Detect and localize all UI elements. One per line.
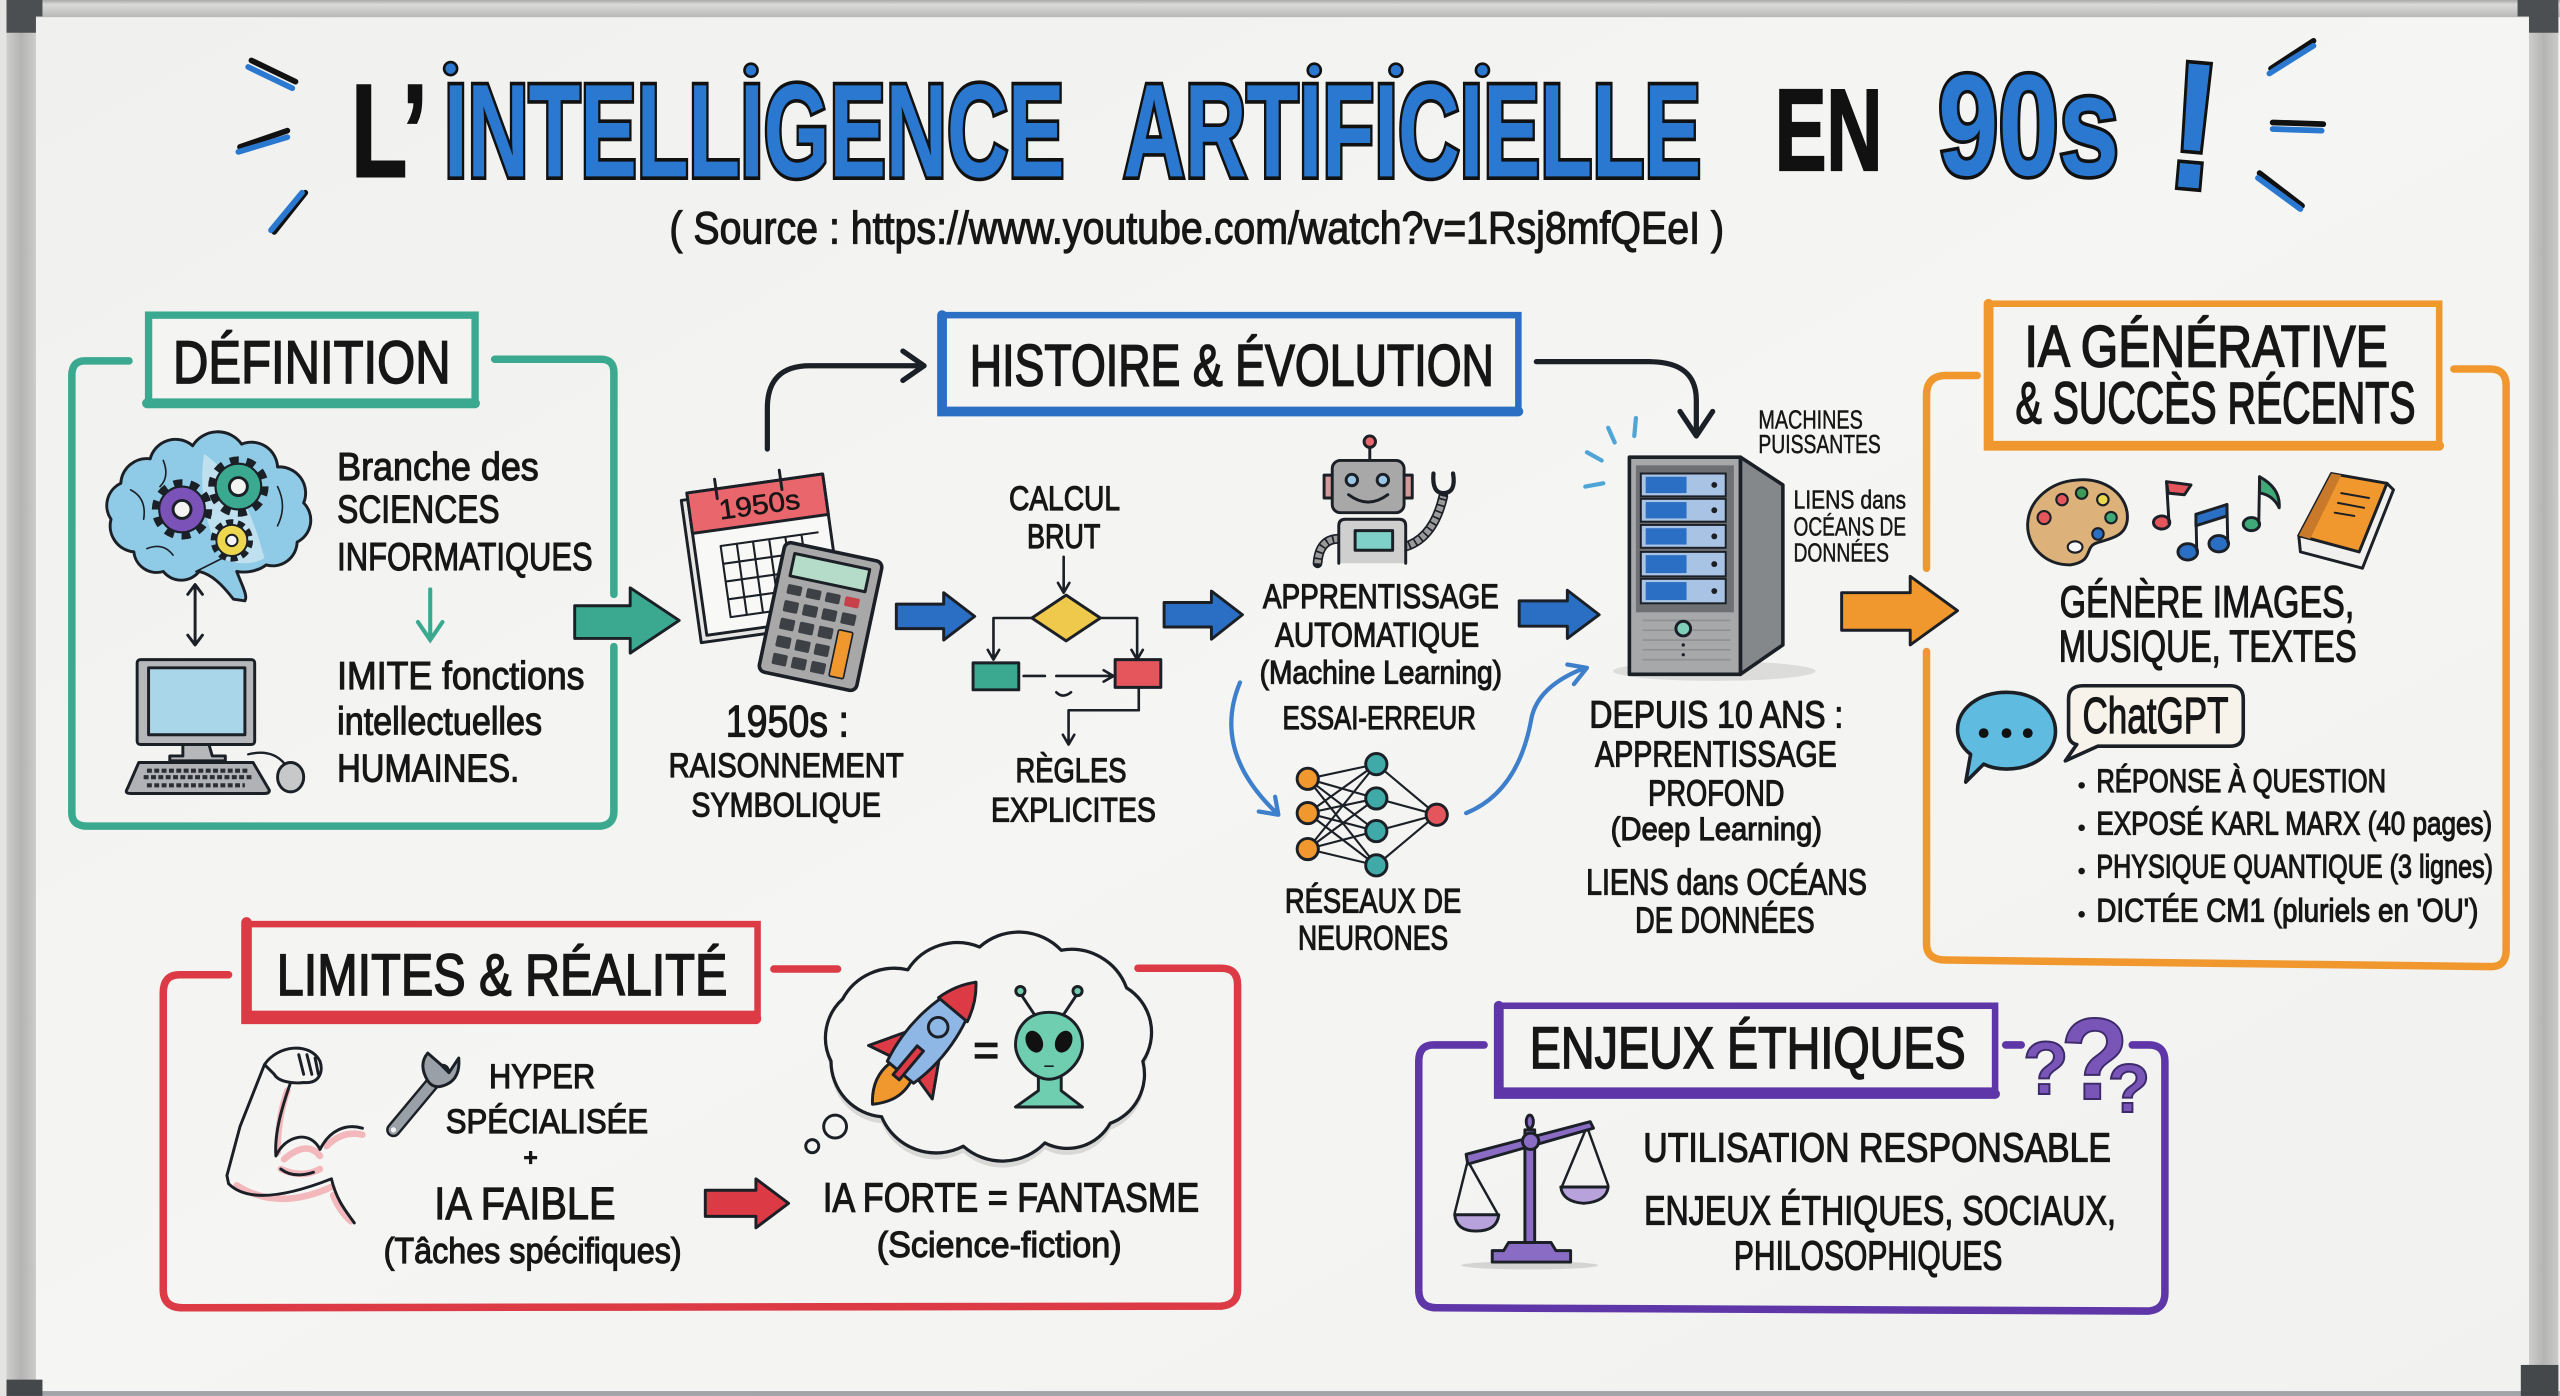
text: machines puissantes [1758,405,1881,459]
icon: rocket [841,955,1008,1132]
title: 90s [1938,46,2119,206]
icon: blue speech bubble [1958,692,2056,782]
text: depuis 10 ans apprentissage profond [1586,693,1867,940]
text: regles explicites: RÈGLES [1016,751,1127,790]
text: imite fonctions intellectuelles humaines: HUMAINES. [337,747,519,790]
panel frame [163,968,1238,1308]
panel frame [1419,1045,2165,1311]
icon: plus sign [524,1151,537,1164]
heading: definition [147,315,475,403]
text: ia faible: IA FAIBLE [434,1178,616,1229]
arrow: curved blue to server [1466,665,1587,813]
icon: alien [1016,986,1082,1107]
chatgpt bubble [2065,686,2243,761]
arrow: black to history heading [767,351,924,449]
text: imite fonctions intellectuelles humaines [337,655,584,790]
title: INTELLIGENCE [444,57,1064,205]
text: machines puissantes: MACHINES [1758,405,1863,435]
text: calcul brut: BRUT [1027,518,1100,556]
title: L’ [351,57,428,205]
panel frame [72,359,614,826]
panel: definition [72,315,614,826]
arrow: teal to history [575,588,679,653]
icon: server sparks [1585,418,1636,487]
heading: generative ai and recent successes [1989,304,2439,446]
text: depuis 10 ans apprentissage profond: (Deep Learning) [1611,810,1822,847]
text: depuis 10 ans apprentissage profond: DE DONNÉES [1635,899,1815,940]
list: chatgpt examples: DICTÉE CM1 (pluriels en 'OU') [2096,892,2478,929]
icon: computer [126,660,304,794]
heading: history and evolution [942,315,1518,411]
heading: definition: DÉFINITION [173,328,451,396]
text: 1950s raisonnement symbolique: SYMBOLIQUE [691,786,881,824]
text: apprentissage automatique: APPRENTISSAGE [1263,578,1499,616]
text: depuis 10 ans apprentissage profond: PROFOND [1648,773,1784,814]
icon: book [2299,474,2393,568]
text: apprentissage automatique: (Machine Learning) [1260,653,1502,690]
icon: thought bubble rocket equals alien [806,932,1152,1168]
text: depuis 10 ans apprentissage profond: LIENS dans OCÉANS [1586,862,1867,903]
heading: limits and reality [247,922,758,1019]
text: depuis 10 ans apprentissage profond: APPRENTISSAGE [1595,734,1837,775]
text: ia faible: (Tâches spécifiques) [384,1230,682,1271]
icon: question marks [2023,994,2150,1127]
heading: generative ai and recent successes: IA GÉNÉRATIVE [2024,315,2388,380]
chatgpt bubble: ChatGPT [2082,687,2229,744]
text: reseaux de neurones: RÉSEAUX DE [1285,882,1461,921]
arrow: blue to flowchart [896,593,975,640]
text: apprentissage automatique: AUTOMATIQUE [1275,617,1479,655]
text: hyper specialisee: HYPER [489,1058,595,1096]
text: enjeux ethiques sociaux philosophiques: PHILOSOPHIQUES [1734,1232,2002,1278]
heading: ethical issues: ENJEUX ÉTHIQUES [1530,1016,1966,1081]
panel: limits and reality [163,922,1238,1308]
text: ia faible [384,1178,682,1271]
icon: equals sign [975,1045,998,1056]
list: chatgpt examples: RÉPONSE À QUESTION [2096,762,2386,799]
text: ia forte fantasme [823,1174,1199,1265]
text: calcul brut [1009,480,1120,556]
text: regles explicites [991,751,1156,829]
text: 1950s raisonnement symbolique [669,697,904,824]
icon: sunburst strokes [238,41,2323,232]
heading: history and evolution: HISTOIRE & ÉVOLUTION [970,333,1494,398]
text: enjeux ethiques sociaux philosophiques: ENJEUX ÉTHIQUES, SOCIAUX, [1644,1188,2116,1234]
arrow: red [705,1179,789,1228]
text: liens dans oceans de donnees small: DONNÉES [1793,538,1889,568]
text: calcul brut: CALCUL [1009,480,1120,518]
title [238,24,2323,232]
text: hyper specialisee: SPÉCIALISÉE [446,1102,648,1141]
text: branche des sciences informatiques: INFORMATIQUES [337,536,593,579]
text: imite fonctions intellectuelles humaines: IMITE fonctions [337,655,584,698]
icon: balance scale [1455,1115,1608,1269]
text: regles explicites: EXPLICITES [991,791,1156,829]
panel: generative ai [1927,304,2506,967]
text: reseaux de neurones: NEURONES [1298,919,1448,957]
icon: double arrow [188,585,202,645]
title: ARTIFICIELLE [1123,57,1701,205]
list: chatgpt examples [2078,762,2493,929]
text: 1950s raisonnement symbolique: 1950s : [726,697,849,746]
source line: ( Source : https://www.youtube.com/watch?v=1Rsj8mfQEeI ) [669,202,1724,253]
text: liens dans oceans de donnees small: OCÉANS DE [1793,512,1906,542]
text: imite fonctions intellectuelles humaines: intellectuelles [337,701,542,744]
icon: music notes [2153,477,2279,560]
text: enjeux ethiques sociaux philosophiques [1644,1188,2116,1278]
text: ia forte fantasme: IA FORTE = FANTASME [823,1174,1199,1220]
icon: question marks: ? [2108,1050,2150,1127]
text: ia forte fantasme: (Science-fiction) [877,1224,1122,1265]
panel: ethical issues [1419,994,2165,1311]
text: hyper specialisee [446,1058,648,1141]
text: apprentissage automatique: ESSAI-ERREUR [1282,699,1476,736]
icon: question marks: ? [2060,994,2129,1124]
heading: ethical issues [1499,1006,1995,1094]
heading: limits and reality: LIMITES & RÉALITÉ [277,943,727,1008]
icon: calendar [679,464,844,643]
panel frame [1927,369,2506,967]
icon: neural network [1297,754,1447,876]
icon: question marks: ? [2023,1026,2069,1110]
title: EN [1775,65,1882,195]
text: genere images musique textes: GÉNÈRE IMAGES, [2060,578,2354,627]
text: machines puissantes: PUISSANTES [1758,429,1881,459]
icon: server tower [1613,457,1816,681]
text: genere images musique textes: MUSIQUE, TEXTES [2059,622,2357,671]
icon: paint palette [2028,480,2127,565]
text: branche des sciences informatiques: SCIENCES [337,488,500,531]
icon: brain with gears [107,432,311,601]
text: reseaux de neurones [1285,882,1461,957]
text: branche des sciences informatiques: Branche des [337,446,539,489]
title: ! [2161,24,2227,229]
text: utilisation responsable: UTILISATION RESPONSABLE [1643,1125,2111,1171]
icon: calendar: 1950s [717,484,802,526]
arrow: black to server [1536,362,1713,436]
icon: wrench [391,1053,459,1132]
arrow: blue to server [1519,590,1599,638]
text: 1950s raisonnement symbolique: RAISONNEMENT [669,747,904,785]
arrow: teal down [418,589,442,640]
text: apprentissage automatique [1260,578,1502,736]
icon: calculator [758,542,883,692]
arrow: curved blue to neural network [1231,682,1278,815]
text: liens dans oceans de donnees small [1793,485,1906,568]
flowchart [973,557,1161,745]
icon: robot [1318,436,1454,563]
text: liens dans oceans de donnees small: LIENS dans [1793,485,1906,515]
text: genere images musique textes [2059,578,2357,671]
text: depuis 10 ans apprentissage profond: DEPUIS 10 ANS : [1589,693,1843,735]
arrow: blue to machine learning [1164,591,1242,639]
text: branche des sciences informatiques [337,446,593,579]
icon: flexed arm [227,1048,362,1223]
arrow: orange to generative ai [1842,576,1958,645]
